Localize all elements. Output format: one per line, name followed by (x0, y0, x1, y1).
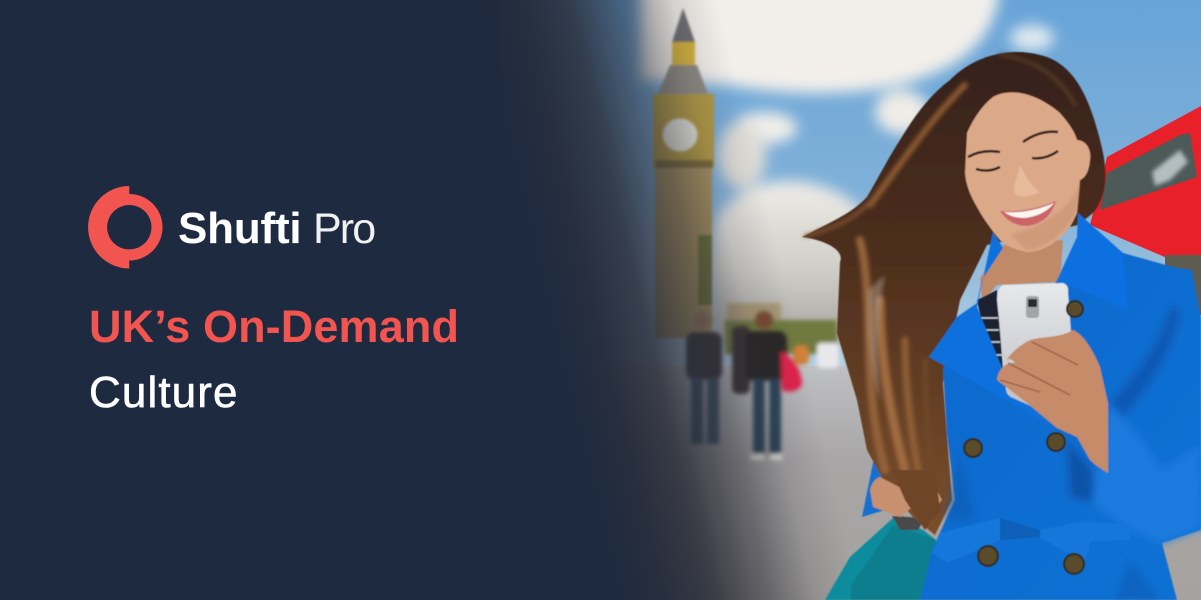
distant street and pavement (500, 366, 1201, 600)
logo mark: coral ring (88, 186, 163, 268)
closed eyes (976, 151, 1058, 171)
eyebrows (968, 132, 1058, 157)
logo wordmark: Shufti: Shufti (178, 204, 301, 253)
hair over hand (892, 470, 940, 530)
sky (500, 0, 1201, 380)
striped shirt (977, 290, 1003, 372)
hair (802, 52, 1105, 535)
lower hand (870, 477, 942, 517)
logo wordmark: Pro: Pro (313, 205, 374, 253)
neck (980, 240, 1063, 302)
woman (802, 52, 1201, 600)
subheading: Culture: Culture (89, 368, 239, 417)
Big Ben tower (653, 8, 714, 338)
sleeve behind hair (862, 458, 900, 517)
clouds (640, 0, 1054, 345)
handbag (825, 516, 936, 600)
phone (997, 283, 1072, 410)
face (965, 92, 1090, 252)
blurred pedestrians (686, 311, 809, 460)
coat buttons (964, 301, 1084, 574)
holding hand (997, 330, 1108, 473)
heading: UK's On-Demand: UK’s On-Demand (89, 301, 459, 352)
distant trees and buildings (725, 303, 839, 368)
left lapel (929, 232, 1055, 428)
coat belt and bow (932, 518, 1130, 563)
trench coat (920, 253, 1201, 600)
smile (1000, 201, 1056, 226)
logo: Shufti Pro (88, 186, 374, 268)
right collar (1057, 213, 1128, 310)
red bus (1090, 106, 1201, 315)
